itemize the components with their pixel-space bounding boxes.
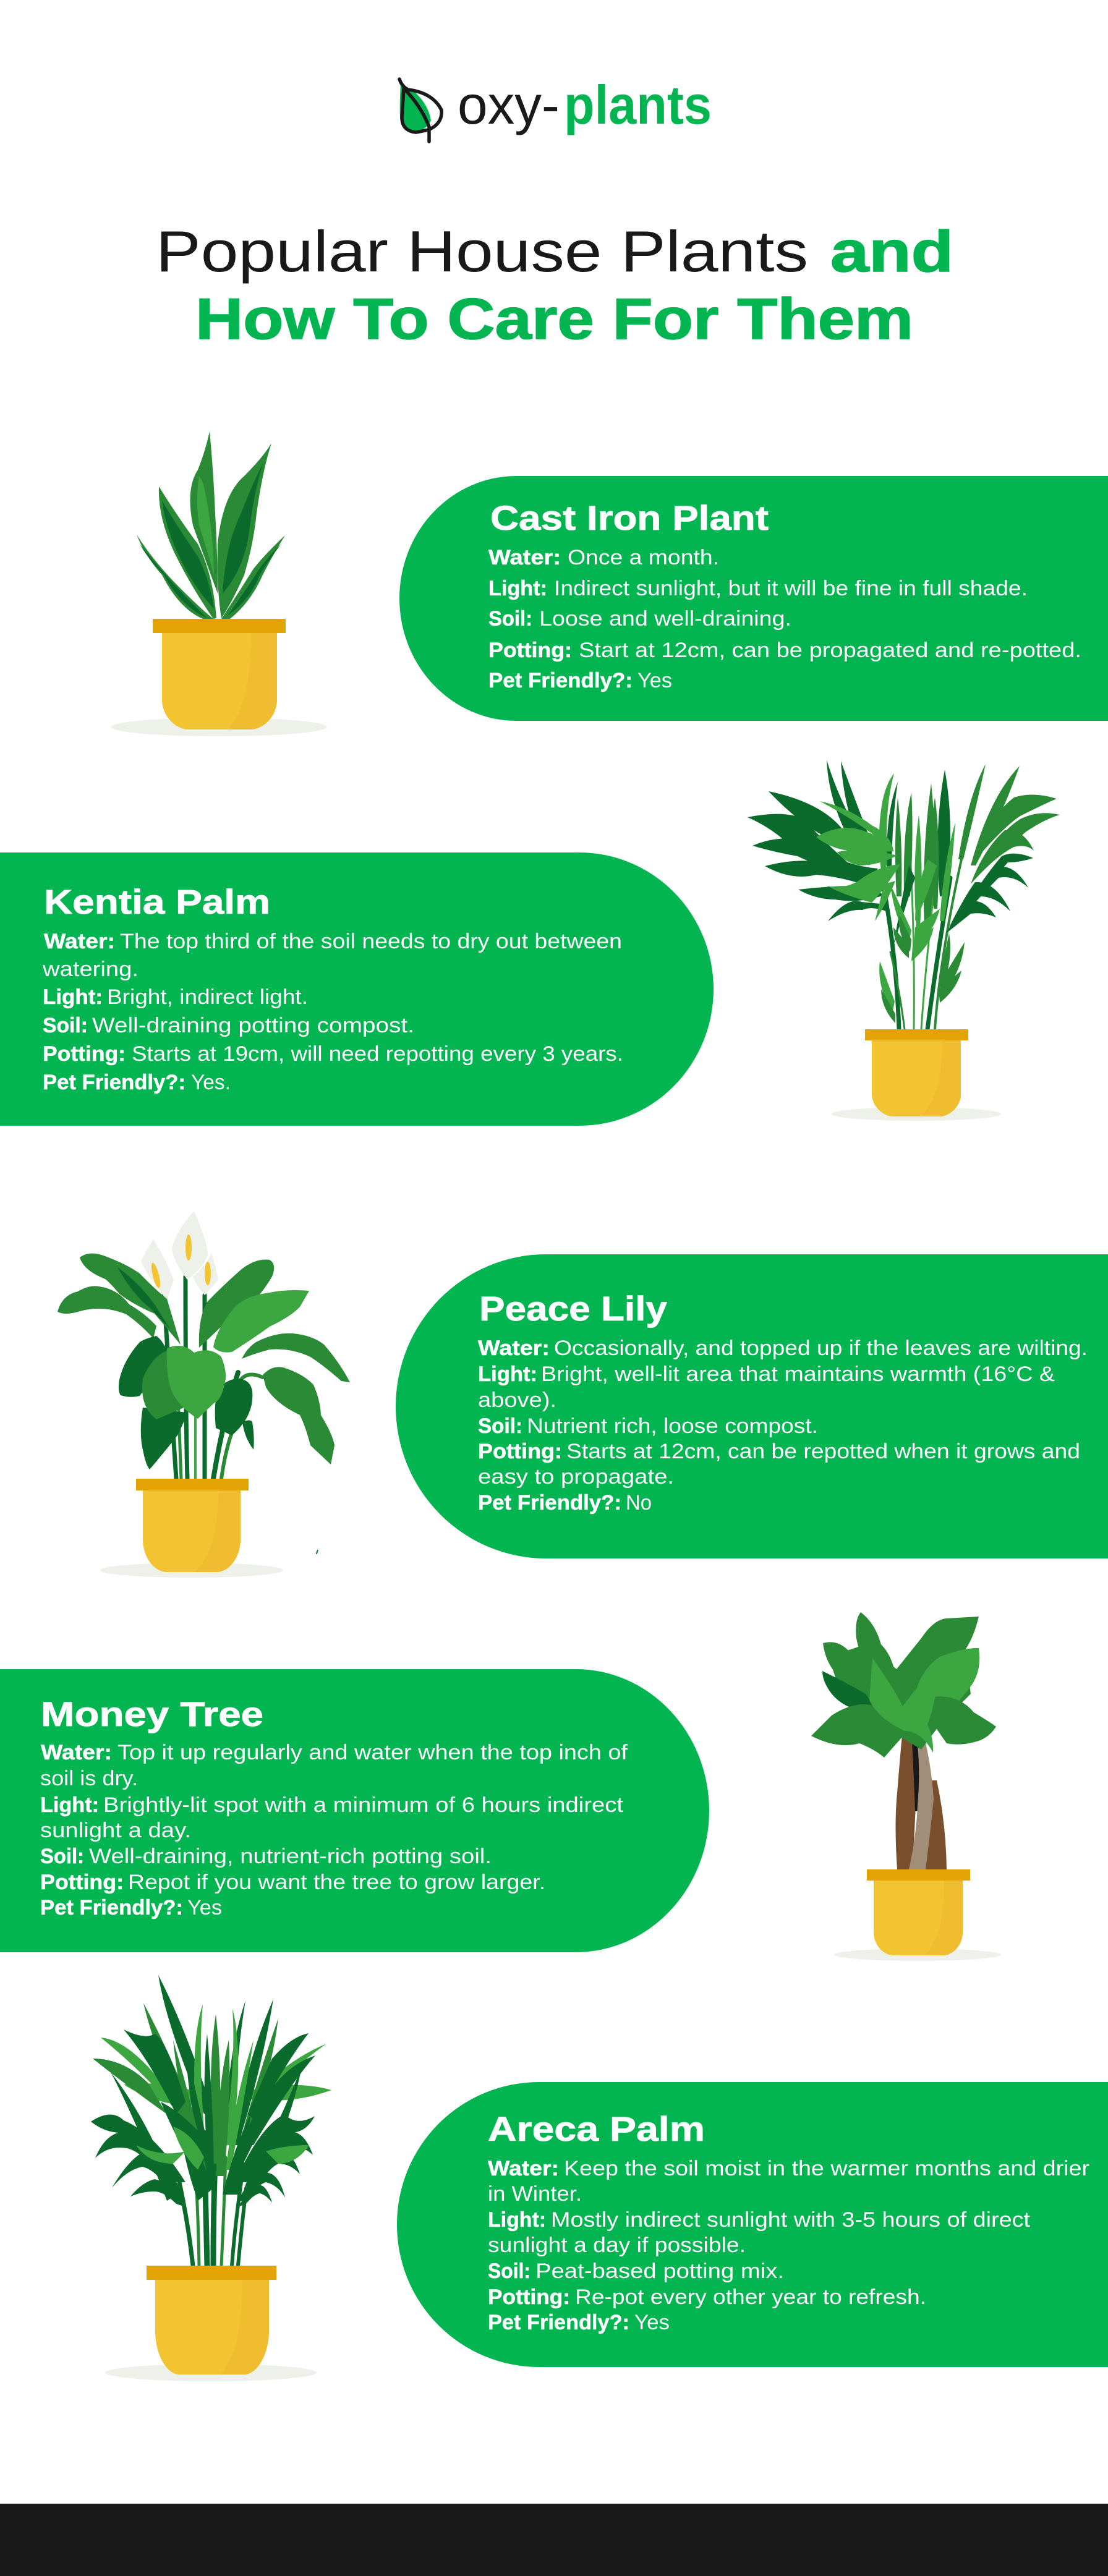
care details: sunlight a day. — [40, 1819, 191, 1842]
icon: leaf — [399, 79, 441, 142]
plant: money tree — [811, 1612, 1001, 1961]
care details: Water: — [478, 1337, 550, 1360]
care details: Soil: — [40, 1845, 84, 1868]
care details: Repot if you want the tree to grow larger. — [128, 1871, 545, 1894]
panel: cast iron plant — [399, 476, 1108, 721]
title: How To Care For Them — [195, 286, 913, 351]
plant: peace lily — [58, 1211, 350, 1578]
care details: Brightly-lit spot with a minimum of 6 hours indirect — [103, 1793, 624, 1817]
care details: Pet Friendly?: — [478, 1491, 621, 1515]
care details: Well-draining potting compost. — [92, 1014, 414, 1037]
care details: Soil: — [43, 1014, 88, 1037]
care details: Peat-based potting mix. — [535, 2259, 784, 2283]
footer bar — [0, 2504, 1108, 2576]
care details — [488, 2157, 1089, 2334]
flowers — [141, 1211, 218, 1300]
panel: areca palm — [397, 2082, 1108, 2367]
care details: Soil: — [488, 2259, 531, 2283]
care details: Pet Friendly?: — [43, 1071, 185, 1094]
care details — [488, 546, 1081, 692]
care details: Start at 12cm, can be propagated and re-potted. — [579, 639, 1081, 662]
logo: oxy-plants — [399, 74, 712, 142]
panel: kentia palm — [0, 852, 714, 1126]
heading: Areca Palm — [488, 2109, 705, 2148]
care details: Water: — [488, 546, 561, 569]
care details: Light: — [43, 985, 103, 1009]
care details: Loose and well-draining. — [539, 607, 791, 631]
care details: Pet Friendly?: — [488, 2311, 629, 2334]
care details: Once a month. — [568, 546, 719, 569]
heading: Peace Lily — [479, 1289, 667, 1328]
care details: Water: — [41, 1741, 112, 1764]
care details: Light: — [488, 2208, 546, 2232]
heading: Cast Iron Plant — [490, 498, 769, 537]
title — [156, 219, 953, 351]
care details: Potting: — [488, 2285, 570, 2309]
care details: Re-pot every other year to refresh. — [575, 2285, 926, 2309]
care details: Potting: — [40, 1871, 124, 1894]
title: and — [830, 219, 953, 284]
care details: Yes — [634, 2311, 670, 2334]
care details: easy to propagate. — [478, 1465, 674, 1489]
care details: Soil: — [478, 1414, 522, 1438]
heading: Kentia Palm — [44, 882, 270, 921]
care details: sunlight a day if possible. — [488, 2234, 746, 2257]
care details: soil is dry. — [40, 1767, 138, 1790]
care details: Bright, indirect light. — [107, 985, 308, 1009]
care details: Keep the soil moist in the warmer months and drier — [564, 2157, 1089, 2180]
care details: Mostly indirect sunlight with 3-5 hours of direct — [551, 2208, 1031, 2232]
care details: Indirect sunlight, but it will be fine in full shade. — [554, 577, 1028, 600]
care details — [40, 1741, 628, 1919]
care details: Pet Friendly?: — [40, 1896, 183, 1919]
plant: cast iron plant — [111, 431, 327, 736]
care details: Yes — [637, 669, 672, 692]
care details: Soil: — [488, 607, 532, 631]
panel: money tree — [0, 1669, 709, 1952]
plant: kentia palm — [748, 760, 1060, 1121]
care details: Potting: — [488, 639, 572, 662]
heading: Money Tree — [41, 1694, 263, 1733]
care details: Starts at 12cm, can be repotted when it grows and — [566, 1440, 1080, 1463]
care details: No — [626, 1491, 652, 1515]
care details: Starts at 19cm, will need repotting every 3 years. — [132, 1042, 623, 1066]
care details: watering. — [42, 958, 138, 981]
care details: Light: — [478, 1362, 537, 1386]
care details: Potting: — [43, 1042, 126, 1066]
logo wordmark: plants — [564, 74, 712, 135]
care details: Bright, well-lit area that maintains warmth (16°C & — [541, 1362, 1055, 1386]
care details: Water: — [488, 2157, 559, 2180]
panel: peace lily — [396, 1254, 1108, 1558]
care details: Pet Friendly?: — [488, 669, 633, 692]
care details: Water: — [44, 930, 115, 953]
care details: Light: — [40, 1793, 99, 1817]
plant: areca palm — [91, 1975, 331, 2381]
title: Popular House Plants — [156, 219, 808, 284]
care details: Occasionally, and topped up if the leaves are wilting. — [554, 1337, 1088, 1360]
care details: Yes — [187, 1896, 222, 1919]
care details — [42, 930, 623, 1094]
care details: Yes. — [191, 1071, 231, 1094]
logo wordmark: oxy- — [458, 74, 560, 135]
care details: Top it up regularly and water when the top inch of — [117, 1741, 628, 1764]
care details: Light: — [488, 577, 547, 600]
logo wordmark — [458, 74, 712, 135]
care details: Nutrient rich, loose compost. — [527, 1414, 818, 1438]
care details: The top third of the soil needs to dry out between — [120, 930, 622, 953]
care details — [478, 1337, 1088, 1515]
care details: Potting: — [478, 1440, 562, 1463]
care details: Well-draining, nutrient-rich potting soil. — [89, 1845, 492, 1868]
care details: above). — [478, 1388, 556, 1412]
care details: in Winter. — [488, 2182, 582, 2206]
